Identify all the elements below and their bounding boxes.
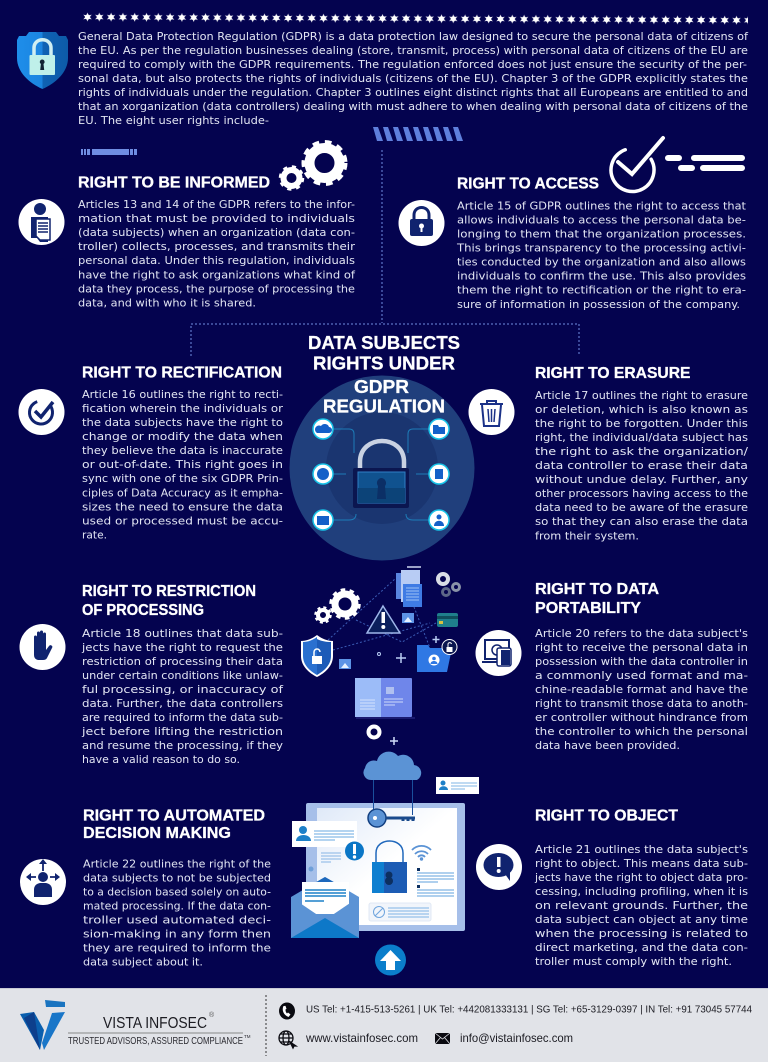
body text: rate. (82, 528, 107, 542)
heading: RIGHT TO ERASURE (535, 365, 690, 382)
panel: right to be informed (18, 142, 356, 310)
website: www.vistainfosec.com (305, 1031, 418, 1045)
body text: them the right to rectification or the right to era- (457, 284, 746, 296)
body text: allows individuals to access the personal data be- (457, 214, 746, 226)
body text: sion-making in any form then (83, 928, 271, 940)
profile card top right (436, 777, 479, 794)
body text: data have been provided. (535, 739, 680, 752)
icon: globe (279, 1031, 296, 1048)
body text: Articles 13 and 14 of the GDPR refers to the infor- (78, 198, 355, 211)
heading: RIGHT TO OBJECT (535, 808, 679, 824)
body text: data need to be aware of the erasure (535, 501, 748, 514)
icon: person with document (18, 199, 64, 245)
body text: ties conducted by the organization and also allows (457, 256, 746, 268)
panel: right to restriction of processing (20, 583, 284, 766)
text lines on tablet (321, 853, 341, 862)
body text (81, 627, 284, 766)
intro paragraph: rights of individuals under the regulation. Chapter 3 outlines eight distinct rights that all Europeans are entitled to and (78, 86, 748, 99)
icon: check badge (18, 389, 64, 435)
key (368, 809, 415, 827)
body text: and resume the processing, if they (82, 739, 284, 752)
heading: OF PROCESSING (82, 602, 204, 619)
network dotted lines (328, 578, 445, 650)
icon: stop hand (20, 624, 66, 670)
heading: RIGHT TO RECTIFICATION (82, 364, 282, 382)
body text: troller used automated deci- (83, 914, 271, 926)
decorative star row (82, 12, 748, 25)
body text: sure of information in possession of the company. (457, 298, 740, 311)
icon: check mark (603, 138, 742, 199)
dotted connector lines (191, 150, 579, 356)
icon: trash bin (468, 389, 514, 435)
folder (417, 640, 457, 672)
panel: right to object (476, 808, 748, 968)
intro paragraph: required to comply with the GDPR requirements. The regulation enforced does not just ensure the security of the per- (78, 58, 747, 71)
tablet (306, 803, 465, 931)
body text: Article 18 outlines that data sub- (82, 627, 283, 640)
body text: troller must comply with the right. (535, 955, 732, 968)
body text: data subject can object at any time (535, 913, 748, 926)
wifi symbol (412, 846, 431, 860)
central title and lock illustration (290, 333, 474, 560)
heading: RIGHT TO BE INFORMED (78, 174, 270, 192)
body text: jects have the right to object data pro- (534, 871, 748, 884)
body text: the right to ask the organization/ (535, 445, 748, 458)
gears (316, 590, 359, 622)
padlock (353, 441, 409, 508)
tagline: TM (244, 1034, 251, 1039)
body text: jects have the right to request the (81, 641, 283, 654)
body text: Article 15 of GDPR outlines the right to access that (457, 200, 747, 212)
heading (83, 808, 265, 842)
heading (82, 583, 256, 619)
body text (535, 627, 748, 752)
cloud (363, 752, 421, 815)
body text: chine-readable format and have the (535, 683, 748, 696)
body text: sizes the need to ensure the data (82, 500, 283, 514)
body text: are required to inform the data sub- (82, 711, 283, 724)
upload arrow badge (375, 944, 406, 976)
title: GDPR (354, 377, 409, 397)
intro paragraph: EU. The eight user rights include- (78, 114, 269, 127)
documents (396, 567, 422, 607)
body text: troller) collects, processes, and transmits their (78, 240, 356, 253)
body text: mated processing. If the data con- (83, 900, 271, 912)
body text: possession with the data controller in (535, 655, 748, 668)
intro paragraph: the EU. As per the regulation businesses dealing (store, transmit, process) with personal data of citizens of the EU are (78, 44, 748, 57)
heading: RIGHT TO ACCESS (457, 176, 599, 192)
body text: Article 22 outlines the right of the (83, 858, 271, 870)
body text: er controller without hindrance from (535, 711, 748, 724)
body text: mation that must be provided to individuals (78, 212, 355, 225)
company name: VISTA INFOSEC (103, 1015, 207, 1032)
body text: the data subjects have the right to (82, 416, 283, 429)
logo mark (20, 1000, 65, 1050)
plus marks (378, 636, 440, 745)
title: DATA SUBJECTS (308, 333, 460, 353)
body text: right to object. This means data sub- (535, 857, 748, 870)
body text: data, and with who it is shared. (78, 296, 256, 310)
body text: from their system. (535, 530, 639, 542)
body text (78, 198, 356, 310)
heading (535, 581, 659, 617)
body text: ful processing, or inaccuracy of (82, 683, 284, 696)
body text: data subject about it. (83, 956, 203, 968)
body text: data they process, the purpose of processing the (78, 282, 355, 296)
blue padlock (372, 841, 407, 893)
title: REGULATION (323, 396, 445, 416)
body text (535, 389, 749, 542)
panel: right to erasure (468, 365, 749, 542)
icon: mail (435, 1033, 450, 1044)
body text: data controller to erase their data (535, 459, 748, 472)
body text: individuals to confirm the use. This also provides (457, 270, 746, 282)
body text: they are required to inform the (83, 942, 271, 954)
icon: phone (279, 1002, 295, 1020)
panel: right to rectification (18, 364, 284, 542)
body text (534, 843, 748, 968)
title: RIGHTS UNDER (313, 354, 455, 374)
body text: data. Further, the data controllers (82, 697, 283, 710)
body text: have a valid reason to do so. (82, 753, 240, 766)
icon: shield with padlock (17, 32, 68, 89)
body text: sync with one of the six GDPR Prin- (82, 472, 283, 485)
body text: longing to them that the organization processes. (457, 228, 746, 240)
body text: right to receive the personal data in (535, 641, 748, 654)
icon: gears (280, 142, 345, 189)
icon: device with data (476, 630, 522, 676)
title (308, 333, 460, 416)
body text: when the processing is related to (535, 927, 748, 940)
body text: personal data. Under this regulation, individuals (78, 254, 355, 267)
node icons (313, 419, 449, 530)
body text: the controller to which the personal (535, 725, 748, 738)
body text: or out-of-date. This right goes in (82, 458, 283, 471)
connector lines (333, 429, 430, 520)
blocked field (369, 903, 431, 921)
body text: under certain conditions like unlaw- (82, 669, 283, 682)
envelope with letter (291, 877, 359, 938)
heading: RIGHT TO DATA (535, 581, 659, 598)
body text: data subjects to not be subjected (83, 872, 271, 884)
shield (301, 635, 333, 677)
circle backdrop (290, 376, 474, 560)
body text: This brings transparency to the processing activi- (456, 242, 746, 254)
company name: ® (209, 1011, 215, 1019)
body text: without undue delay. Further, any (535, 473, 749, 486)
decorative stripes (373, 127, 463, 141)
body text: the right to be forgotten. Under this (535, 417, 748, 430)
illustration: cloud, key, tablet and envelope (291, 752, 479, 976)
panel: right to access (398, 138, 747, 311)
body text: ject before lifting the restriction (81, 725, 283, 738)
body text (82, 388, 284, 542)
heading: RIGHT TO AUTOMATED (83, 808, 265, 824)
body text: cessing, including profiling, when it is (535, 885, 748, 898)
intro paragraph (78, 30, 749, 127)
icon: exclamation speech bubble (476, 844, 522, 890)
lower gear (368, 726, 380, 738)
body text: Article 21 outlines the data subject's (535, 843, 748, 856)
panel: right to automated decision making (20, 808, 271, 968)
body text: used or processed must be accu- (82, 514, 283, 528)
email: info@vistainfosec.com (460, 1031, 573, 1045)
body text: on relevant grounds. Further, the (535, 899, 748, 912)
body text: Article 17 outlines the right to erasure (535, 389, 748, 402)
body text: ciples of Data Accuracy as it empha- (82, 486, 283, 500)
body text (83, 858, 271, 968)
footer band (0, 988, 768, 1062)
body text: fication wherein the individuals or (82, 402, 284, 415)
intro paragraph: that an xorganization (data controllers) dealing with must adhere to when dealing with personal data of citizens of the (78, 100, 748, 113)
body text (456, 200, 747, 311)
body text: direct marketing, and the data con- (535, 941, 748, 954)
warning triangle (367, 606, 400, 633)
body text: (data subjects) when an organization (data con- (78, 226, 355, 239)
heading: DECISION MAKING (83, 825, 231, 842)
illustration: data security network (301, 567, 460, 745)
icon: padlock (398, 200, 444, 246)
heading: RIGHT TO RESTRICTION (82, 583, 256, 600)
open book laptop (355, 678, 415, 718)
tagline: TRUSTED ADVISORS, ASSURED COMPLIANCE (68, 1035, 243, 1047)
body text: Article 20 refers to the data subject's (535, 627, 748, 640)
body text: other processors having access to the (535, 487, 748, 500)
icon: person with arrows (20, 859, 66, 905)
body text: Article 16 outlines the right to recti- (82, 388, 283, 401)
body text: change or modify the data when (82, 430, 283, 443)
body text: right to transmit those data to anoth- (535, 697, 748, 710)
body text: restriction of processing their data (82, 655, 283, 668)
picture tiles and credit card (339, 613, 458, 669)
body text: so that they can also erase the data (535, 515, 748, 528)
profile card left (292, 821, 357, 847)
body text: a commonly used format and ma- (535, 669, 748, 682)
heading: PORTABILITY (535, 600, 642, 617)
panel: right to data portability (476, 581, 748, 752)
small gears (438, 574, 460, 596)
body text: right, the individual/data subject has (535, 431, 748, 444)
body text: to a decision based solely on auto- (83, 886, 271, 898)
intro paragraph: General Data Protection Regulation (GDPR) is a data protection law designed to secure the personal data of citizens of (78, 30, 749, 43)
body text: have the right to ask organizations what kind of (78, 268, 356, 282)
body text: or deletion, which is also known as (535, 403, 748, 416)
bullet text lines (417, 868, 454, 896)
intro paragraph: sonal data, but also protects the rights of individuals (citizens of the EU). Chapter 3 of the GDPR explicitly states the (78, 72, 748, 85)
exclamation badge (345, 842, 364, 860)
body text: they believe the data is inaccurate (82, 444, 283, 457)
